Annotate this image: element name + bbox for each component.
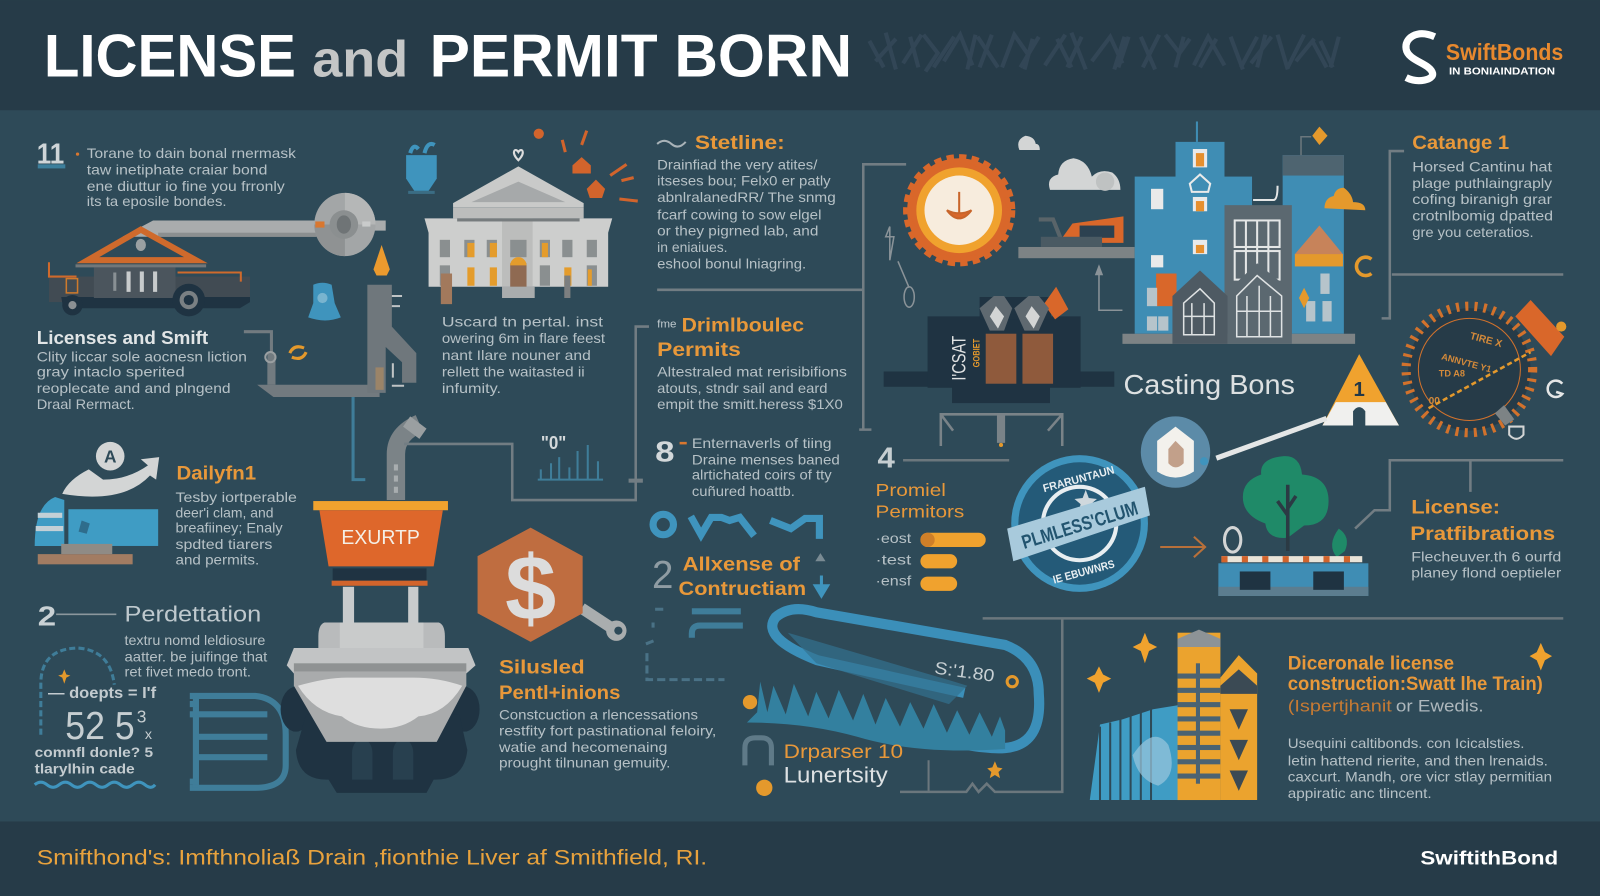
bracket: Catange xyxy=(1382,151,1563,318)
text: step 8 xyxy=(655,436,840,499)
text: Licenses and Smift: reoplecate and and plngend xyxy=(37,381,231,396)
text: Drilbouclec Permits xyxy=(657,315,847,412)
text: step 8: alrtichated coirs of tty xyxy=(692,468,832,483)
icon: clock sun gear xyxy=(907,158,1011,262)
chart: dashed gear with figures: 3 xyxy=(137,706,146,726)
icon: round stamp seal xyxy=(1007,455,1150,592)
text: Dailyfn1: and permits. xyxy=(176,552,259,567)
text: Licenses and Smift: gray intaclo sperited xyxy=(37,365,185,380)
chart: dashed gear with figures: comnfl donle? 5 xyxy=(35,745,153,760)
icon: blue city buildings xyxy=(1135,121,1344,334)
icon: gray pipe with valve disc xyxy=(122,193,386,256)
footer text: SwiftithBond xyxy=(1420,847,1558,869)
text: step 2 Perdettation xyxy=(38,601,268,680)
icon: dashed diagram xyxy=(646,609,743,680)
text: Dailyfn1: Dailyfn1 xyxy=(177,463,256,485)
chart: dashed gear with figures: tlarylhin cade xyxy=(35,762,135,777)
icon: A badge with swoosh xyxy=(62,442,159,497)
icon: orange ring xyxy=(1356,257,1371,276)
icon: blue glyph shapes xyxy=(653,514,819,539)
text: Licenses and Smift: Draal Rermact. xyxy=(37,397,135,412)
text: step 2 Perdettation: Perdettation xyxy=(124,601,261,626)
text: Stetline: abnlralanedRR/ The snmg xyxy=(657,190,836,205)
text: Dailyfn1: deer'i clam, and xyxy=(176,505,273,520)
text: Catange 1 xyxy=(1412,132,1553,240)
text: Catange 1: Catange 1 xyxy=(1412,132,1509,154)
text: Dailyfn1: Tesby iortperable xyxy=(176,490,297,505)
title: LICENSE xyxy=(44,23,296,90)
icon: tower with blue fan and sparkles xyxy=(1087,630,1552,800)
text: Allxense of Contructiam xyxy=(652,553,828,600)
text: step 4 Promiel Permitors: Promiel xyxy=(876,480,946,500)
icon: gray table frame xyxy=(941,414,1062,447)
text: Drparser 10 Lunertsity: Drparser 10 xyxy=(784,741,903,763)
icon: A badge with swoosh: A xyxy=(104,446,117,466)
text: Silusled Pentlinions: watie and hecomenaing xyxy=(498,740,667,755)
chart: horizontal pill bars: ·test xyxy=(876,552,911,567)
icon: tachometer dial: TD A8 xyxy=(1439,369,1465,379)
step 11 intro text: 11 xyxy=(37,138,64,170)
text: Stetline: Stetline: xyxy=(695,132,785,154)
text: Catange 1: gre you ceteratios. xyxy=(1412,225,1534,240)
text: Catange 1: crotnlbomig dpatted xyxy=(1412,208,1553,223)
footer text: Smifthond's: Imfthnoliaß Drain ,fionthie Liver af Smithfield, RI. xyxy=(37,845,707,869)
icon: dark machine block xyxy=(884,287,1114,403)
icon: round stamp seal: FRARUNTAUN xyxy=(1042,464,1116,495)
chart: dashed gear with figures: — doepts = I'f xyxy=(48,685,157,702)
connector: blue line to funnel xyxy=(353,397,365,480)
icon: blue vase xyxy=(406,144,437,194)
text: Silusled Pentlinions: restfity fort pastinational feloiry, xyxy=(499,724,716,739)
text: step 4 Promiel Permitors: Permitors xyxy=(876,501,965,521)
text: Stetline: in eniaiues. xyxy=(657,240,728,255)
text: step 8: 8 xyxy=(655,436,674,468)
text: step 8: Draine menses baned xyxy=(692,452,840,467)
text: step 2 Perdettation: textru nomd leldiosure xyxy=(124,633,266,648)
text: Stetline: or they pigrned lab, and xyxy=(657,224,818,239)
text: Catange 1: Horsed Cantinu hat xyxy=(1412,159,1552,174)
text: Silusled Pentlinions: Silusled xyxy=(499,657,585,679)
text: Stetline: eshool bonul lniagring. xyxy=(657,256,806,271)
icon: small truck on platform xyxy=(1018,216,1135,258)
icon: tree on planter xyxy=(1218,456,1368,596)
connector: lines with star xyxy=(900,618,1563,792)
text: Diceronale license: Usequini caltibonds. con Icicalsties. xyxy=(1288,736,1524,751)
icon: gray hopper body xyxy=(287,622,476,742)
text: License Pratfibrations: planey flond oeptieler xyxy=(1411,566,1562,581)
text: step 4 Promiel Permitors xyxy=(876,442,1009,521)
icon: orange spark burst xyxy=(534,129,638,201)
text: Drilbouclec Permits: Altestraled mat rerisibifions xyxy=(657,365,847,380)
icon: blue pipes xyxy=(190,696,286,788)
icon: blue looped band with grass xyxy=(743,609,1039,751)
text: Diceronale license xyxy=(1288,652,1552,801)
text: Dailyfn1 xyxy=(176,463,297,567)
bracket connector xyxy=(657,164,906,430)
icon: building on truck xyxy=(49,230,250,316)
icon: warning triangle with number 1: 1 xyxy=(1354,379,1365,401)
heading: Casting Bons: Casting Bons xyxy=(1123,369,1295,400)
title xyxy=(44,23,852,90)
icon: tachometer dial: TIRE X xyxy=(1469,331,1503,350)
chart: dashed gear with figures: x xyxy=(145,727,152,743)
step 11 intro text: ene diuttur io fine you frronly xyxy=(87,179,285,194)
icon: roof ornaments, yellow cloud and diamond xyxy=(1299,127,1365,308)
text: Diceronale license: caxcurt. Mandh, ore vicr stlay permitian xyxy=(1288,770,1552,785)
text: Silusled Pentlinions: prought tilnunan gemuity. xyxy=(499,755,670,770)
text: capitol note: infumity. xyxy=(442,381,501,396)
text: step 2 Perdettation: ret fivet medo tront. xyxy=(124,665,251,680)
text: Stetline: Drainfiad the very atites/ xyxy=(657,157,818,172)
text: License Pratfibrations: License: xyxy=(1411,496,1500,518)
text: Stetline: fcarf cowing to sow elgel xyxy=(657,207,821,222)
icon: clouds xyxy=(1018,136,1120,191)
text: Drilbouclec Permits: fme xyxy=(657,319,677,331)
arrow: orange xyxy=(1160,537,1205,557)
text: capitol note: nant Ilare nouner and xyxy=(442,348,591,363)
step 11 intro text: taw inetiphate craiar bond xyxy=(87,163,267,178)
footer band xyxy=(0,821,1600,896)
logo: SwiftBonds xyxy=(1406,34,1563,81)
icon: round stamp seal: PLMLESS'CLUM xyxy=(1019,498,1141,554)
chart: horizontal pill bars xyxy=(876,531,986,591)
icon: monitor with striped drum xyxy=(35,497,158,564)
text: License Pratfibrations xyxy=(1410,496,1562,581)
footer text xyxy=(37,845,1558,869)
icon: gray pipe machinery xyxy=(244,285,416,397)
text: Diceronale license: Diceronale license xyxy=(1288,652,1454,674)
step 11 intro text: Torane to dain bonal rnermask xyxy=(87,146,296,161)
chart: horizontal pill bars: ·eost xyxy=(876,531,911,546)
text: Allxense of Contructiam: Contructiam xyxy=(679,578,806,600)
text: Diceronale license: (Ispertjhanit xyxy=(1288,697,1392,715)
text: Stetline xyxy=(657,132,836,271)
arrows near city xyxy=(886,227,1122,310)
connector: tree to license xyxy=(1355,460,1563,529)
text: License Pratfibrations: Pratfibrations xyxy=(1410,523,1555,545)
text: Drilbouclec Permits: empit the smitt.heress $1X0 xyxy=(657,397,843,412)
icon: dollar hexagon with wrench xyxy=(478,528,627,642)
chart: thin bar chart with connector xyxy=(404,327,649,500)
logo: SwiftBonds: SwiftBonds xyxy=(1446,39,1563,65)
text: Allxense of Contructiam: 2 xyxy=(652,554,673,597)
chart: dashed gear with figures xyxy=(35,648,157,787)
text: Drparser 10 Lunertsity: Lunertsity xyxy=(784,763,889,788)
text: Silusled Pentlinions: Constcuction a rlencessations xyxy=(499,707,698,722)
text: Licenses and Smift xyxy=(37,327,247,412)
text: capitol note: Uscard tn pertal. inst xyxy=(442,315,603,330)
icon: round stamp seal: IE EBUWNRS xyxy=(1052,558,1116,586)
text: step 4 Promiel Permitors: 4 xyxy=(878,442,895,474)
icon: orange funnel EXURTP xyxy=(313,501,448,624)
text: Stetline: itseses bou; Felx0 er patly xyxy=(657,174,831,189)
title: and xyxy=(312,31,408,88)
text: step 2 Perdettation: aatter. be juifinge that xyxy=(124,649,268,664)
icon: dark gabled houses xyxy=(1122,263,1355,344)
text: Diceronale license: construction:Swatt lhe Train) xyxy=(1288,673,1543,695)
text: Diceronale license: or Ewedis. xyxy=(1396,697,1484,715)
icon: magnifier avatar xyxy=(1141,416,1327,488)
text: step 8: cuñured hoattb. xyxy=(692,484,795,499)
text: Dailyfn1: breafiiney; Enaly xyxy=(176,521,283,536)
icon: orange funnel EXURTP: EXURTP xyxy=(341,527,420,549)
chart: thin bar chart with connector: "0" xyxy=(541,432,566,453)
text: Drilbouclec Permits: Permits xyxy=(657,339,741,361)
step 11 intro text: its ta eposile bondes. xyxy=(87,194,227,209)
text: Allxense of Contructiam: Allxense of xyxy=(683,553,801,575)
text: Licenses and Smift: Licenses and Smift xyxy=(37,327,208,348)
text: step 8: Enternaverls of tiing xyxy=(692,436,832,451)
icon: capitol building xyxy=(424,150,612,304)
text: Drilbouclec Permits: atouts, stndr sail and eard xyxy=(657,381,828,396)
logo: SwiftBonds: IN BONIAINDATION xyxy=(1449,67,1555,78)
title: PERMIT BORN xyxy=(430,23,852,90)
text: Silusled Pentlinions xyxy=(498,657,716,770)
text: capitol note: owering 6m in flare feest xyxy=(442,331,605,346)
text: Dailyfn1: spdted tiarers xyxy=(176,537,273,552)
icon: warning triangle with number 1 xyxy=(1322,354,1399,426)
icon: dark base supports xyxy=(281,687,480,793)
icon: blue looped band with grass: S:'1.80 xyxy=(933,658,996,686)
text: License Pratfibrations: Flecheuver.th 6 ourfd xyxy=(1411,549,1561,564)
text: Catange 1: cofing biranigh grar xyxy=(1412,192,1553,207)
icon: dark machine block: GOBIET xyxy=(972,339,982,367)
text: step 2 Perdettation: 2 xyxy=(38,601,56,632)
icon: tachometer dial: 00 xyxy=(1429,396,1440,407)
step 11 intro text xyxy=(37,138,296,209)
icon: tachometer dial xyxy=(1406,300,1566,439)
chart: dashed gear with figures: 52 5 xyxy=(65,705,135,748)
text: capitol note xyxy=(442,315,605,396)
text: Diceronale license: appiratic anc tlincent. xyxy=(1288,786,1432,801)
text: Diceronale license: letin hattend rierite, and then lrenaids. xyxy=(1288,753,1548,768)
text: Drparser 10 Lunertsity xyxy=(745,738,903,796)
text: Drilbouclec Permits: Drimlboulec xyxy=(682,315,804,337)
icon: tachometer dial: ANNVTE Y1 xyxy=(1440,351,1492,374)
header band xyxy=(0,0,1600,110)
text: capitol note: rellett the waitasted ii xyxy=(442,365,585,380)
text: Licenses and Smift: Clity liccar sole aocnesn liction xyxy=(37,349,247,364)
icon: dark machine block: I'CSAT xyxy=(948,336,970,381)
icon: discharge pipe xyxy=(396,416,427,500)
chart: horizontal pill bars: ·ensf xyxy=(876,574,911,589)
icon: dollar hexagon with wrench: $ xyxy=(505,537,556,639)
text: Catange 1: plage puthlaingraply xyxy=(1412,176,1552,191)
icon: flame and blue bell xyxy=(308,245,390,320)
text: Silusled Pentlinions: Pentl+inions xyxy=(499,682,620,704)
